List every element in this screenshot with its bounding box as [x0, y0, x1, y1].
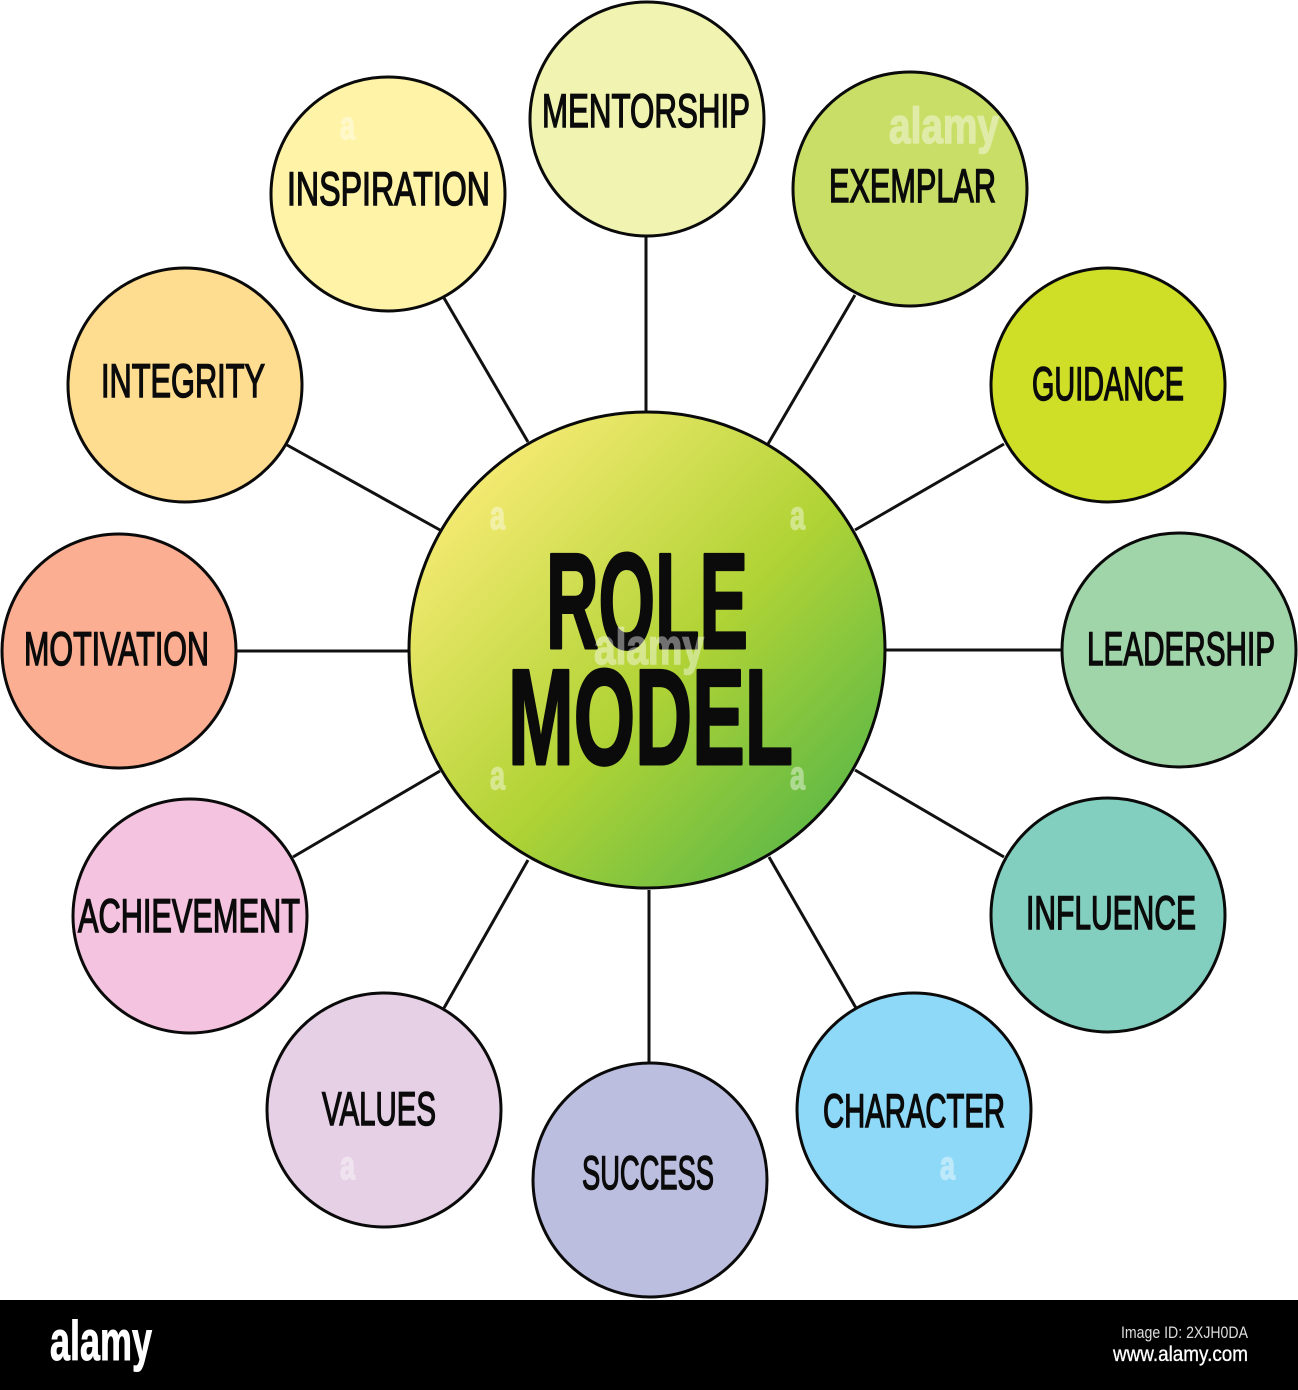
- node: leadership: [1062, 533, 1296, 767]
- node: guidance: GUIDANCE: [1032, 357, 1184, 410]
- watermarks: [340, 98, 999, 1188]
- footer website: www.alamy.com: [1112, 1343, 1248, 1366]
- footer bar: [0, 1300, 1298, 1390]
- watermarks: a: [790, 754, 806, 798]
- central circle: role model: [409, 412, 885, 888]
- node: values: [267, 993, 501, 1227]
- node: achievement: [73, 799, 307, 1033]
- node: integrity: [68, 268, 302, 502]
- node: character: CHARACTER: [823, 1084, 1005, 1137]
- node: success: [533, 1063, 767, 1297]
- node: motivation: MOTIVATION: [24, 622, 209, 675]
- central circle: role model: ROLE: [546, 525, 748, 677]
- watermarks: a: [940, 1144, 956, 1188]
- node: character: [797, 993, 1031, 1227]
- node: mentorship: [530, 2, 764, 236]
- watermarks: a: [340, 104, 356, 148]
- watermarks: a: [490, 754, 506, 798]
- node: influence: INFLUENCE: [1026, 886, 1196, 939]
- node: values: VALUES: [322, 1082, 436, 1135]
- node: inspiration: INSPIRATION: [287, 162, 490, 215]
- node: guidance: [991, 268, 1225, 502]
- node: achievement: ACHIEVEMENT: [78, 889, 300, 942]
- watermarks: a: [790, 494, 806, 538]
- node: mentorship: MENTORSHIP: [542, 84, 750, 137]
- watermarks: alamy: [594, 619, 704, 675]
- node: exemplar: EXEMPLAR: [829, 159, 996, 212]
- watermarks: a: [340, 1144, 356, 1188]
- node: inspiration: [271, 77, 505, 311]
- node: influence: [991, 798, 1225, 1032]
- footer image id: Image ID: 2XJH0DA: [1121, 1323, 1249, 1342]
- connector spokes: [237, 237, 1061, 1063]
- watermarks: a: [490, 494, 506, 538]
- node: integrity: INTEGRITY: [101, 354, 265, 407]
- node: exemplar: [793, 72, 1027, 306]
- central circle: role model: MODEL: [508, 641, 793, 793]
- node: success: SUCCESS: [582, 1146, 714, 1199]
- node: motivation: [2, 534, 236, 768]
- footer logo: alamy: alamy: [50, 1309, 152, 1372]
- watermarks: alamy: [889, 98, 999, 154]
